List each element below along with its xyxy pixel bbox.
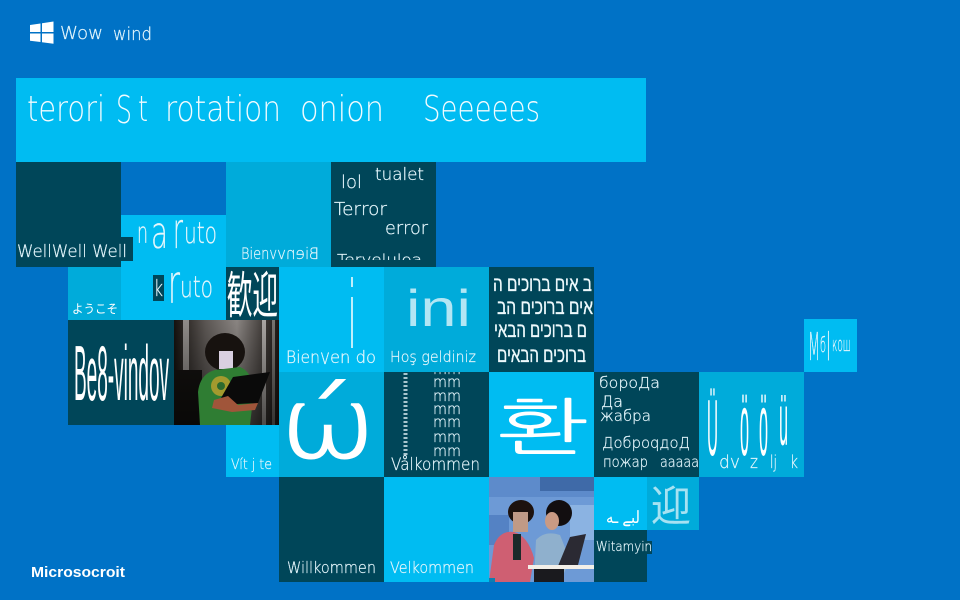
tile: Cyrillic words: бороДа xyxy=(599,374,660,392)
tile: mm, Vålkommen xyxy=(384,372,489,477)
title banner: t xyxy=(138,89,148,130)
tile: naruto / kruto: uto xyxy=(180,270,213,304)
tile: Мбlкош xyxy=(804,319,857,372)
tile: naruto / kruto: n xyxy=(137,216,148,250)
tile: mm, Vålkommen: mm xyxy=(433,428,461,446)
tile: naruto / kruto: a xyxy=(151,208,168,259)
tile: Cyrillic words xyxy=(594,372,699,477)
tile: Hebrew welcome: ם ברוכים הבאי xyxy=(494,319,587,342)
tile: WellWellWell: WellWell Well xyxy=(17,242,127,262)
tile: mm, Vålkommen: mm xyxy=(433,400,461,418)
tile: Hebrew welcome xyxy=(489,267,594,372)
tile: lol, tualet, Terror, error: lol xyxy=(341,172,362,193)
tile: lol, tualet, Terror, error: Terror xyxy=(334,199,388,220)
tile: Мбlкош: б xyxy=(820,333,826,357)
photo: person with laptop xyxy=(174,320,279,425)
tile: ini, Hoş geldiniz xyxy=(384,267,489,372)
tile: Cyrillic words: ДоброqдоД xyxy=(602,434,690,452)
tile: Witamyin xyxy=(594,530,652,582)
title banner: S xyxy=(116,88,132,132)
tile: Korean 환 xyxy=(489,372,594,477)
tile: Willkommen: Willkommen xyxy=(287,558,376,577)
tile: ようこそ xyxy=(68,267,121,320)
tile: WellWellWell xyxy=(16,162,133,267)
tile: Bienvenido mirrored xyxy=(226,162,331,267)
tile: Bienvenido mirrored: Bienv xyxy=(277,244,319,263)
tile: tall umlaut letters xyxy=(699,372,804,477)
tile: 歓迎: 歓迎 xyxy=(227,268,278,324)
tile: tall umlaut letters: k xyxy=(790,452,798,473)
tile: naruto / kruto: k xyxy=(154,277,163,302)
title banner xyxy=(16,78,646,162)
tile: Arabic-style script: لبے ـه xyxy=(606,508,640,527)
tile: Korean 환: 환 xyxy=(496,396,588,458)
tile: tall umlaut letters: z xyxy=(750,452,758,473)
tile: naruto / kruto: r xyxy=(173,202,183,260)
tile: Мбlкош: l xyxy=(826,325,831,369)
tile: Vít j te: Vít j te xyxy=(231,457,272,473)
tile: Cyrillic words: ааааа xyxy=(660,453,699,471)
tile: Witamyin: Witamyin xyxy=(596,540,652,555)
tile: naruto / kruto xyxy=(121,202,226,320)
tile: lol, tualet, Terror, error: tualet xyxy=(375,165,424,185)
tile: tall umlaut letters: dv xyxy=(719,452,740,473)
tile: ini, Hoş geldiniz: ini xyxy=(406,280,471,338)
photo: two people at laptop xyxy=(489,477,594,582)
tile: naruto / kruto: uto xyxy=(184,216,217,250)
tile: tall umlaut letters: ö xyxy=(740,375,749,474)
tile: mm, Vålkommen: Vålkommen xyxy=(391,454,480,475)
tile: Cyrillic words: жабра xyxy=(600,407,651,425)
tile: tall umlaut letters: lj xyxy=(770,452,777,473)
tile: Arabic-style script xyxy=(594,477,647,530)
tile: mm, Vålkommen: mm xyxy=(433,442,461,460)
tile: Мбlкош: М xyxy=(808,325,820,369)
icon: window mark xyxy=(30,22,54,44)
tile: Velkommen: Velkommen xyxy=(390,558,474,577)
title banner: onion xyxy=(300,89,384,130)
brand: Microsocroit: Microsocroit xyxy=(31,565,125,581)
tile: Hebrew welcome: אים ברוכים הב xyxy=(497,296,593,319)
tile: Bienvenido with tall i: en do xyxy=(330,348,376,368)
tile: ようこそ: ようこそ xyxy=(72,302,118,316)
tile: lol, tualet, Terror, error xyxy=(331,162,436,269)
tile: mm, Vålkommen: mm xyxy=(433,413,461,431)
tile: Bienvenido with tall i: v xyxy=(320,345,330,369)
logo: Wow wind xyxy=(30,22,152,45)
title banner: rotation xyxy=(165,89,281,130)
tile: mm, Vålkommen: mm xyxy=(433,360,461,378)
tile: Velkommen xyxy=(384,477,489,582)
tile: Cyrillic words: Да xyxy=(601,392,623,411)
tile: ini, Hoş geldiniz: Hoş geldiniz xyxy=(390,348,476,366)
tile: tall umlaut letters: Ü xyxy=(707,383,718,472)
tile: Vít j te xyxy=(226,425,279,477)
logo: Wow wind: Wow xyxy=(60,23,103,44)
tile: Willkommen xyxy=(279,477,384,582)
tile: Мбlкош: кош xyxy=(832,332,851,356)
tile: omega with tonos: ώ xyxy=(280,368,377,480)
title banner: terori xyxy=(27,89,105,130)
tile: naruto / kruto: r xyxy=(168,253,180,316)
tile: mm, Vålkommen: mm xyxy=(433,373,461,391)
tile: mm, Vålkommen: mm xyxy=(433,387,461,405)
tile: tall umlaut letters: ü xyxy=(779,381,788,461)
tile: lol, tualet, Terror, error: Terveluloa xyxy=(337,251,422,269)
tile: tall umlaut letters: ö xyxy=(759,375,768,474)
tile: Bienvenido with tall i: Bien xyxy=(286,348,320,368)
tile: Be8-vindov xyxy=(68,320,174,425)
title banner: Seeeees xyxy=(423,89,540,130)
tile: 迎: 迎 xyxy=(651,483,691,530)
tile: Hebrew welcome: ברוכים הבאים xyxy=(497,344,586,367)
tile: lol, tualet, Terror, error: error xyxy=(385,218,429,239)
tile: Bienvenido mirrored: Bienv xyxy=(241,244,277,263)
text: Be8-vindov xyxy=(74,329,169,417)
tile: Cyrillic words: пожар xyxy=(603,453,648,471)
tile: 歓迎 xyxy=(226,267,279,324)
tile: Hebrew welcome: ב אים ברוכים ה xyxy=(493,273,592,296)
tile: Bienvenido with tall i xyxy=(279,267,384,372)
logo: Wow wind: wind xyxy=(113,24,152,45)
